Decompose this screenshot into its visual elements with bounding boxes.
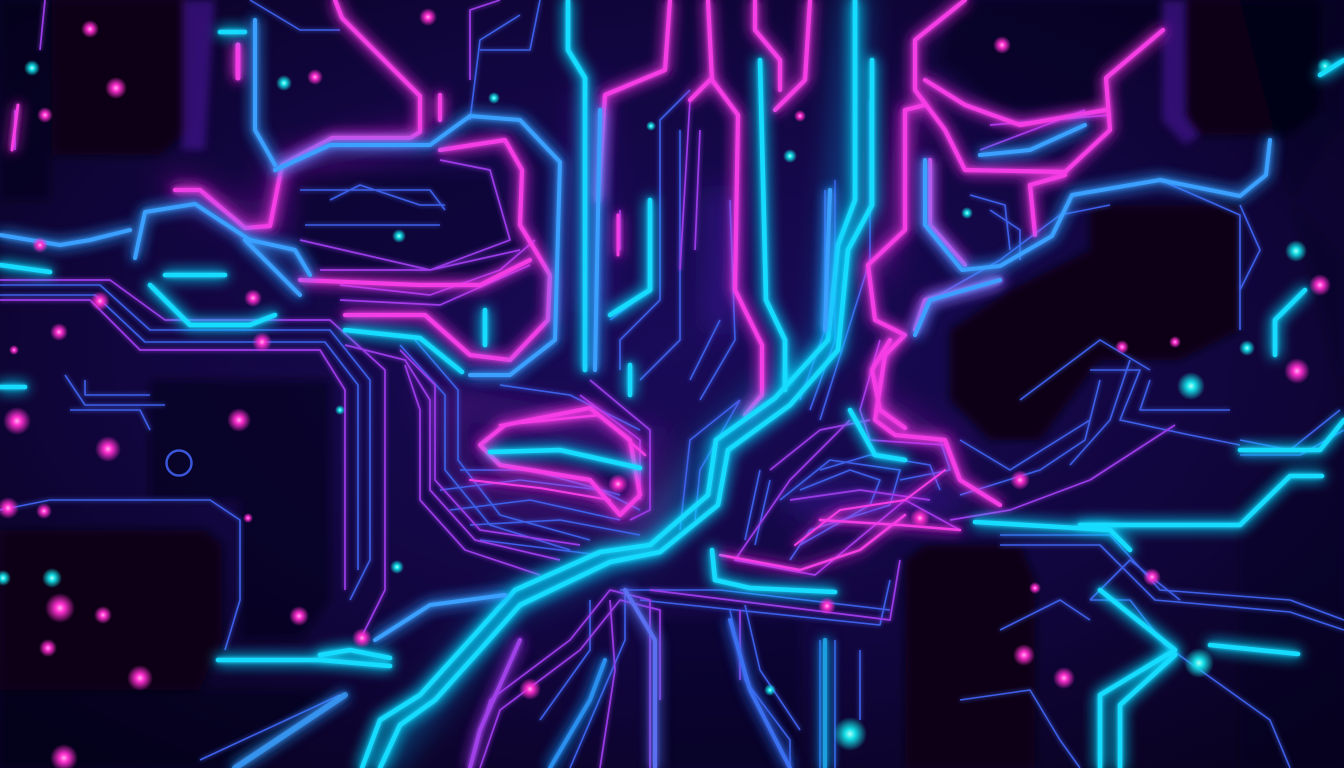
ambient glow (175, 0, 950, 768)
magenta neon traces (12, 0, 1163, 570)
purple chip edges (182, 0, 1200, 150)
ring pad (166, 450, 192, 476)
